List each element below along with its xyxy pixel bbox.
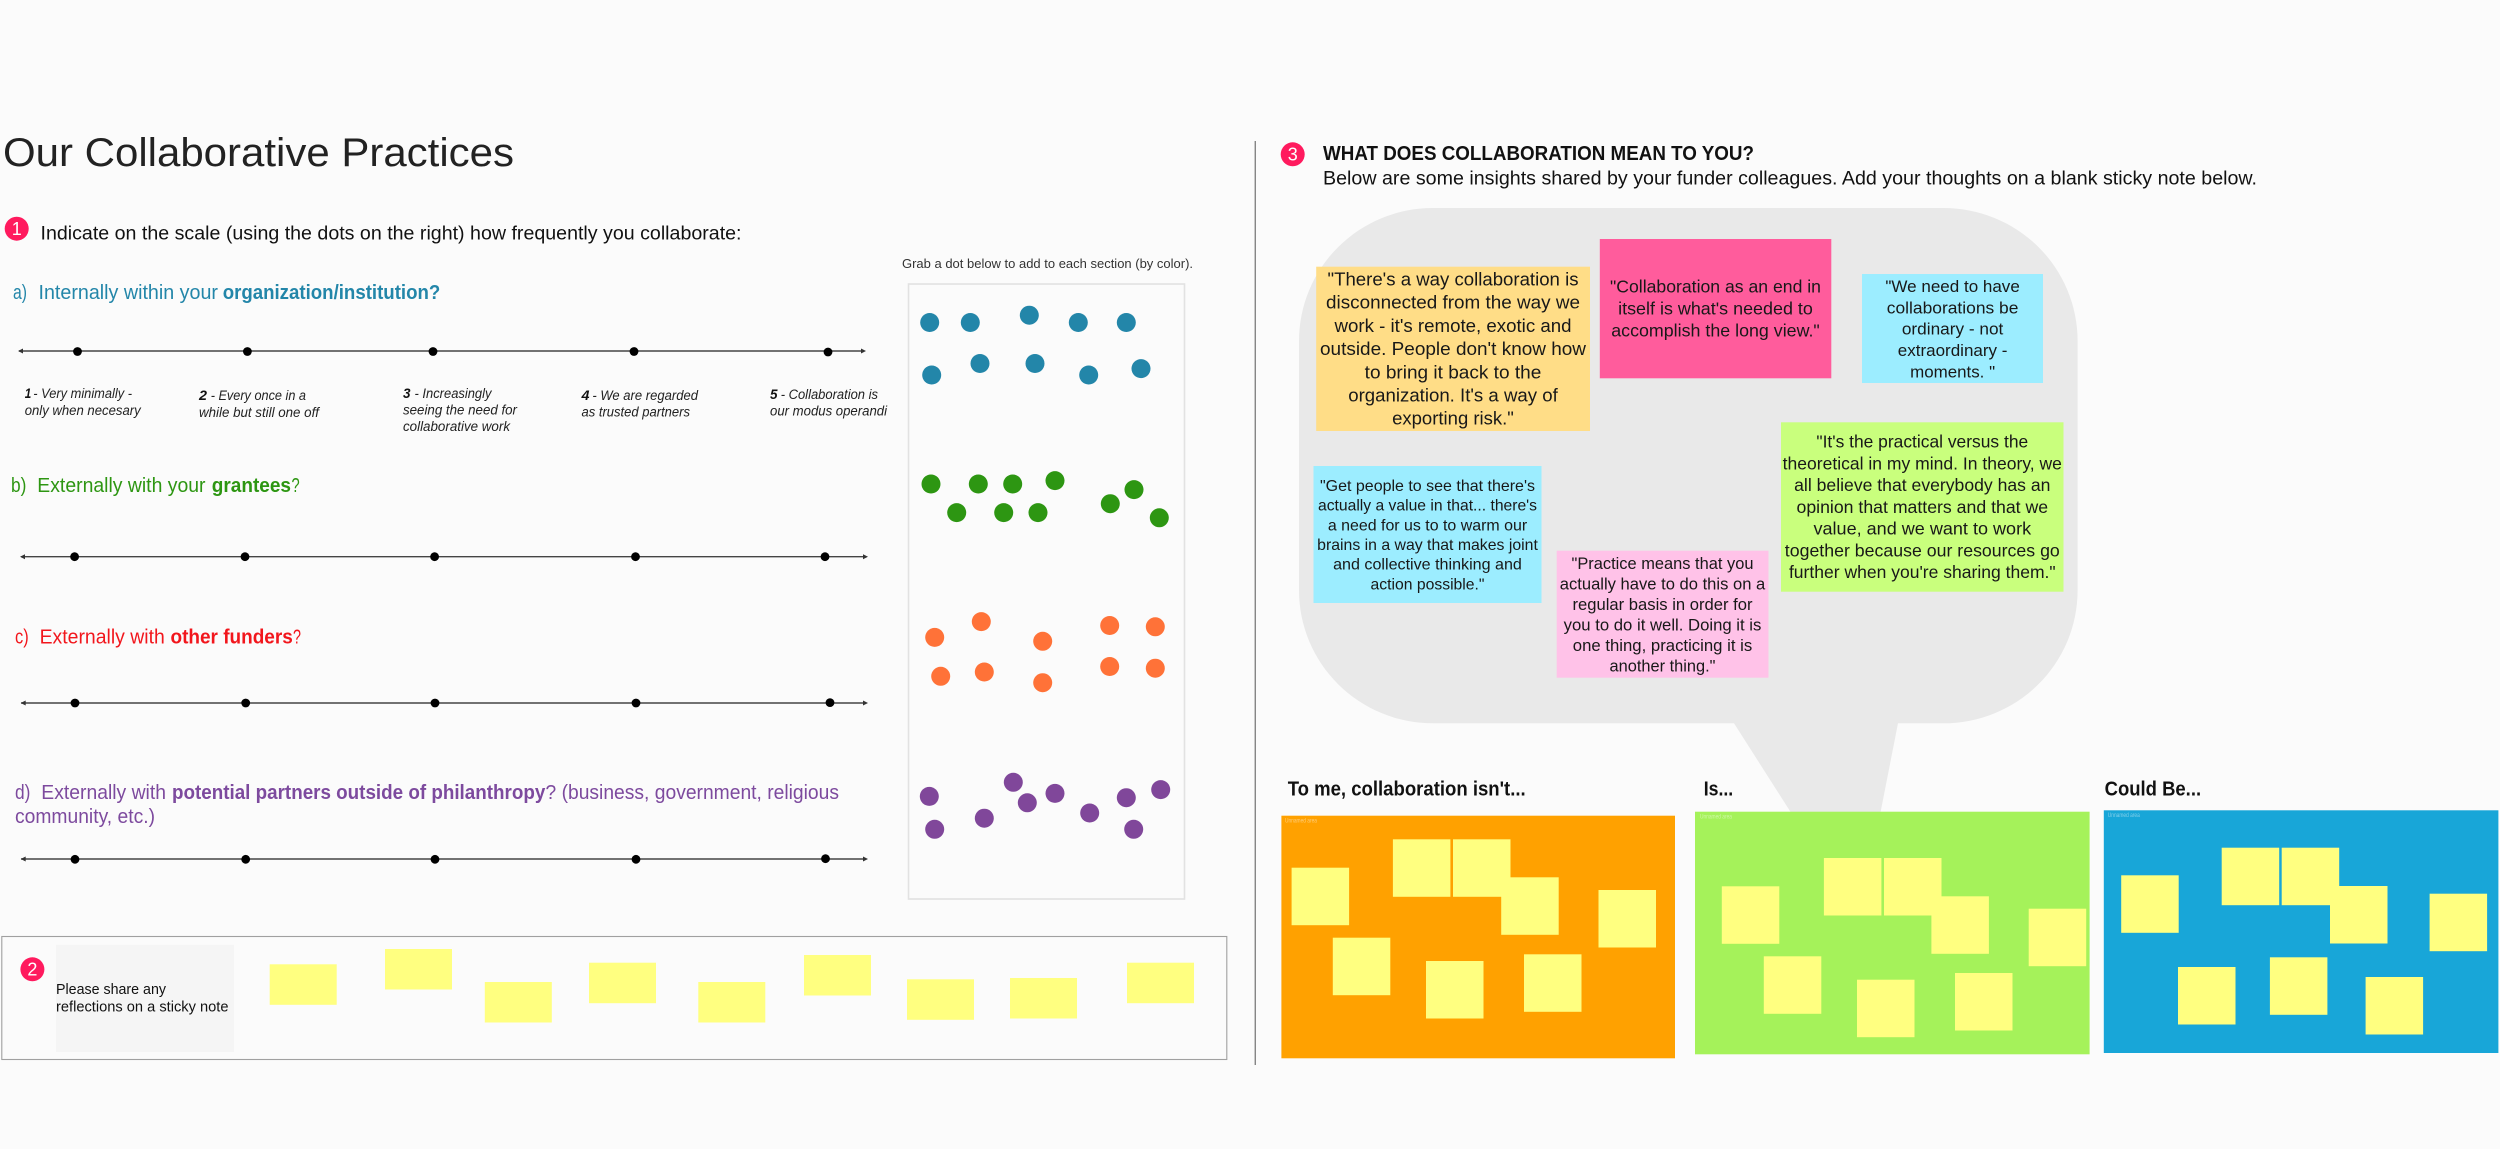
quote: practical versus theoretical: opinion that matters and that we bbox=[1796, 497, 2048, 517]
quote: disconnected: organization. It's a way of bbox=[1348, 385, 1559, 406]
reflections prompt box: Please share any bbox=[56, 981, 166, 998]
quote: ordinary: "We need to have bbox=[1885, 277, 2020, 296]
panel: isn't: Unnamed area bbox=[1285, 818, 1318, 824]
quote: practical versus theoretical: value, and we want to work bbox=[1814, 519, 2031, 539]
quote: practice means: another thing." bbox=[1610, 657, 1716, 675]
quote: disconnected: outside. People don't know how bbox=[1320, 338, 1587, 359]
scale legend 3: - Increasingly bbox=[414, 386, 493, 401]
quote: practical versus theoretical: all believe that everybody has an bbox=[1794, 475, 2050, 495]
section 3 heading: WHAT DOES COLLABORATION MEAN TO YOU? bbox=[1323, 143, 1754, 165]
question c: c) bbox=[15, 626, 29, 649]
panel: could be bbox=[2104, 810, 2498, 1053]
green dots bbox=[922, 471, 1169, 527]
panel: reflections bbox=[2, 936, 1227, 1060]
panel: dot palette bbox=[908, 284, 1184, 899]
quote: ordinary: ordinary - not bbox=[1902, 320, 2004, 339]
scale legend 2: 2 bbox=[198, 388, 208, 403]
isn't stickies bbox=[1292, 839, 1656, 1018]
quote: disconnected: exporting risk." bbox=[1392, 408, 1514, 429]
orange dots bbox=[925, 612, 1165, 692]
quote: ordinary: collaborations be bbox=[1887, 298, 2018, 317]
quote: disconnected bbox=[1316, 267, 1590, 431]
quote: ordinary bbox=[1862, 274, 2043, 383]
quote: practical versus theoretical bbox=[1781, 422, 2064, 592]
scale legend 1: only when necesary bbox=[25, 403, 142, 418]
scale legend 2: - Every once in a bbox=[211, 388, 306, 403]
quote: practice means: you to do it well. Doing it is bbox=[1564, 616, 1761, 634]
quote: practical versus theoretical: theoretical in my mind. In theory, we bbox=[1783, 453, 2062, 473]
scale a bbox=[18, 347, 866, 356]
scale legend 5: our modus operandi bbox=[770, 404, 888, 418]
question a: Internally within your bbox=[38, 281, 218, 304]
quote: warm our brains: and collective thinking and bbox=[1333, 557, 1522, 574]
is stickies bbox=[1722, 858, 2086, 1037]
scale legend 3: seeing the need for bbox=[403, 402, 517, 418]
quote: end in itself bbox=[1600, 239, 1831, 378]
column heading: is: Is... bbox=[1704, 778, 1733, 800]
scale legend 3: collaborative work bbox=[403, 419, 511, 434]
quote: practice means: "Practice means that you bbox=[1572, 555, 1754, 573]
quote: warm our brains: a need for us to to warm our bbox=[1328, 517, 1528, 534]
question b: grantees bbox=[212, 474, 291, 497]
step 1 badge: 1 bbox=[12, 219, 22, 239]
scale instruction: Indicate on the scale (using the dots on the right) how frequently you collaborate: bbox=[40, 223, 742, 244]
step 3 badge: 3 bbox=[1288, 145, 1298, 165]
scale legend 3: 3 bbox=[403, 386, 411, 401]
scale legend 4: as trusted partners bbox=[582, 404, 690, 420]
step 2 badge bbox=[20, 957, 44, 981]
quote: practice means: actually have to do this on a bbox=[1560, 575, 1766, 593]
quote: ordinary: moments. " bbox=[1910, 362, 1995, 381]
reflections prompt box bbox=[56, 945, 234, 1052]
question d: ? (business, government, religious bbox=[546, 781, 839, 804]
question c: ? bbox=[293, 626, 301, 649]
question b: b) bbox=[11, 474, 26, 497]
quote: practical versus theoretical: together because our resources go bbox=[1785, 540, 2060, 560]
quote: warm our brains: actually a value in that... there's bbox=[1318, 498, 1537, 515]
dot palette caption: Grab a dot below to add to each section (by color). bbox=[902, 256, 1193, 271]
speech bubble bbox=[1299, 208, 2078, 815]
scale legend 1: - Very minimally - bbox=[33, 386, 132, 401]
quote: practice means: regular basis in order for bbox=[1572, 596, 1753, 614]
scale legend 4: 4 bbox=[580, 388, 590, 403]
scale legend 1: 1 bbox=[25, 386, 31, 401]
quote: warm our brains: brains in a way that makes joint bbox=[1317, 537, 1538, 554]
scale c bbox=[21, 698, 868, 707]
reflections prompt box: reflections on a sticky note bbox=[56, 999, 228, 1016]
question d: potential partners outside of philanthropy bbox=[172, 781, 546, 804]
quote: practice means bbox=[1557, 551, 1768, 678]
question d bbox=[15, 781, 839, 828]
question a: a) bbox=[13, 281, 27, 304]
question a: organization/institution? bbox=[223, 281, 440, 304]
scale legend 4 bbox=[580, 388, 698, 420]
question d: community, etc.) bbox=[15, 805, 155, 828]
column heading: isn't: To me, collaboration isn't... bbox=[1288, 778, 1526, 800]
scale legend 5 bbox=[770, 387, 888, 418]
scale legend 3 bbox=[403, 386, 517, 434]
panel: isn't bbox=[1281, 816, 1675, 1058]
question d: d) bbox=[15, 781, 30, 804]
panel: could be: Unnamed area bbox=[2108, 813, 2140, 819]
question b: ? bbox=[292, 474, 300, 497]
question a bbox=[13, 281, 440, 304]
question c: other funders bbox=[170, 626, 293, 649]
quote: practical versus theoretical: "It's the practical versus the bbox=[1816, 432, 2028, 452]
scale legend 5: - Collaboration is bbox=[781, 387, 878, 402]
scale legend 2 bbox=[198, 388, 320, 420]
step 1 badge bbox=[5, 217, 29, 241]
teal dots bbox=[920, 306, 1150, 384]
blank reflection stickies bbox=[270, 949, 1194, 1022]
quote: disconnected: disconnected from the way we bbox=[1326, 292, 1580, 313]
quote: disconnected: to bring it back to the bbox=[1365, 361, 1541, 382]
could be stickies bbox=[2121, 848, 2487, 1034]
scale legend 4: - We are regarded bbox=[592, 388, 698, 403]
quote: end in itself: accomplish the long view." bbox=[1611, 321, 1820, 341]
column heading: could be: Could Be... bbox=[2105, 778, 2201, 800]
scale b bbox=[20, 552, 868, 561]
step 3 badge bbox=[1281, 142, 1305, 166]
scale legend 1 bbox=[25, 386, 142, 418]
quote: practice means: one thing, practicing it is bbox=[1573, 637, 1752, 655]
quote: warm our brains: "Get people to see that there's bbox=[1320, 478, 1535, 495]
quote: warm our brains bbox=[1314, 466, 1542, 603]
quote: end in itself: itself is what's needed to bbox=[1618, 299, 1813, 319]
step 2 badge: 2 bbox=[27, 960, 37, 980]
quote: warm our brains: action possible." bbox=[1370, 576, 1484, 593]
question c bbox=[15, 626, 301, 649]
quote: ordinary: extraordinary - bbox=[1898, 341, 2007, 360]
quote: disconnected: work - it's remote, exotic and bbox=[1333, 315, 1572, 336]
question b bbox=[11, 474, 300, 497]
panel: is bbox=[1695, 812, 2090, 1054]
scale d bbox=[21, 854, 868, 864]
quote: practical versus theoretical: further when you're sharing them." bbox=[1789, 562, 2056, 582]
quote: end in itself: "Collaboration as an end in bbox=[1610, 277, 1821, 297]
question c: Externally with bbox=[40, 626, 165, 649]
panel: is: Unnamed area bbox=[1700, 814, 1733, 820]
scale legend 5: 5 bbox=[770, 387, 778, 402]
title: Our Collaborative Practices bbox=[3, 131, 514, 175]
purple dots bbox=[920, 773, 1170, 839]
question b: Externally with your bbox=[37, 474, 206, 497]
question d: Externally with bbox=[41, 781, 166, 804]
panel: frequency scales bbox=[5, 217, 888, 864]
section 3 subheading: Below are some insights shared by your funder colleagues. Add your thoughts on a blank sticky note below. bbox=[1323, 169, 2257, 190]
quote: disconnected: "There's a way collaboration is bbox=[1328, 269, 1578, 290]
scale legend 2: while but still one off bbox=[199, 405, 320, 420]
